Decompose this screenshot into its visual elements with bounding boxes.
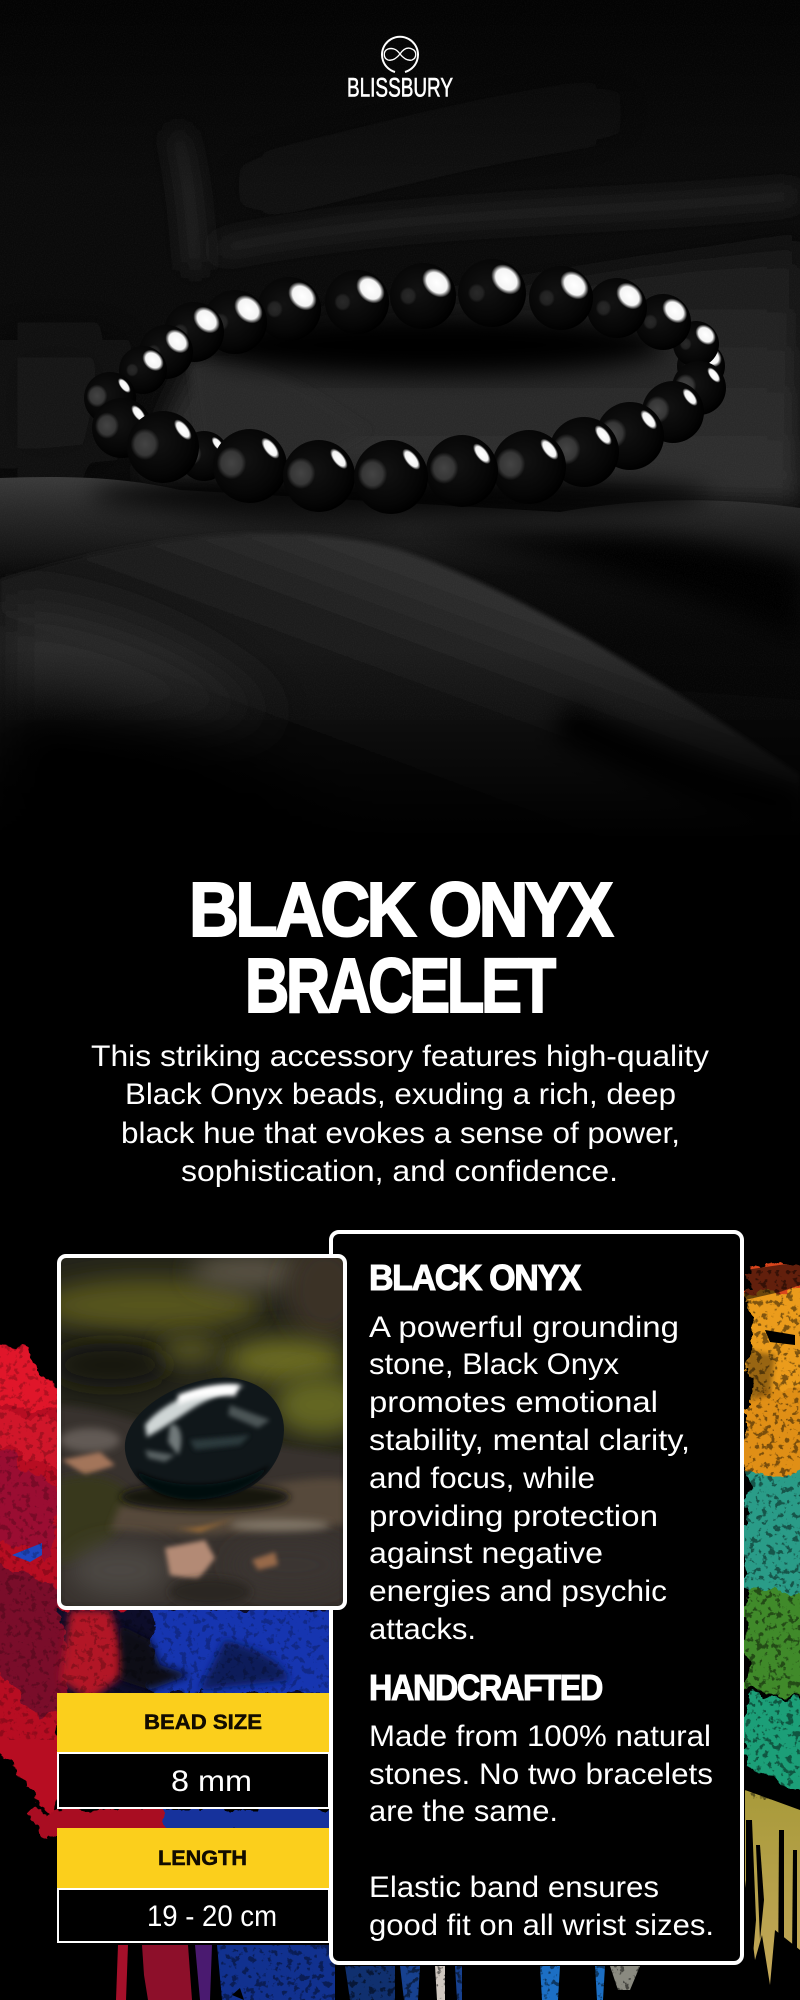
icon: infinity ring: [382, 37, 418, 72]
bracelet shadow: [90, 475, 710, 515]
hero photo: black bracelet on satin: [0, 0, 800, 850]
text block: handcrafted description: good fit on all wrist sizes.: [369, 1909, 714, 1942]
text block: handcrafted description: Made from 100% natural: [369, 1720, 711, 1753]
heading: black onyx: BLACK ONYX: [369, 1257, 581, 1298]
text block: black onyx description: [369, 1311, 690, 1646]
title: [189, 867, 613, 1029]
title: BLACK ONYX: [189, 867, 613, 953]
spec table: bead size: BEAD SIZE: [144, 1711, 262, 1734]
satin fabric backdrop: [0, 0, 800, 850]
text block: black onyx description: A powerful grounding: [369, 1311, 679, 1344]
card border: [59, 1256, 345, 1608]
paint drip streaks: [746, 1820, 797, 1990]
paint drips bottom: [116, 1945, 640, 2000]
heading: handcrafted: HANDCRAFTED: [369, 1667, 602, 1708]
intro paragraph: [91, 1040, 709, 1188]
spec table: bead size: 8 mm: [171, 1765, 252, 1798]
text block: black onyx description: attacks.: [369, 1613, 476, 1646]
text block: black onyx description: stability, mental clarity,: [369, 1424, 690, 1457]
photo card: black onyx stone: [57, 1254, 347, 1610]
paint splash: right colours: [745, 1262, 800, 1990]
logo: Blissbury: [347, 37, 453, 102]
spec table: length: [57, 1828, 329, 1942]
text block: black onyx description: providing protection: [369, 1500, 658, 1533]
panel: stone details: [331, 1232, 742, 1963]
spec table: length: LENGTH: [158, 1847, 247, 1870]
bracelet beads: [84, 258, 726, 514]
intro paragraph: Black Onyx beads, exuding a rich, deep: [125, 1078, 676, 1111]
text block: black onyx description: promotes emotional: [369, 1386, 658, 1419]
text block: handcrafted description: Elastic band ensures: [369, 1871, 659, 1904]
text block: black onyx description: and focus, while: [369, 1462, 595, 1495]
spec table: length: 19 - 20 cm: [147, 1900, 277, 1933]
brand name: BLISSBURY: [347, 72, 453, 102]
stone scene: [61, 1258, 343, 1606]
intro paragraph: sophistication, and confidence.: [181, 1155, 618, 1188]
text block: black onyx description: against negative: [369, 1537, 603, 1570]
text block: handcrafted description: [369, 1720, 714, 1942]
text block: black onyx description: energies and psychic: [369, 1575, 667, 1608]
intro paragraph: black hue that evokes a sense of power,: [121, 1117, 680, 1150]
title: BRACELET: [245, 943, 556, 1029]
text block: handcrafted description: are the same.: [369, 1795, 558, 1828]
text block: black onyx description: stone, Black Onyx: [369, 1348, 619, 1381]
paint splash: left red and blue: [0, 1340, 640, 2000]
icon: black onyx stone: [125, 1378, 284, 1500]
text block: handcrafted description: stones. No two bracelets: [369, 1758, 713, 1791]
intro paragraph: This striking accessory features high-quality: [91, 1040, 709, 1073]
spec table: bead size: [57, 1693, 329, 1808]
